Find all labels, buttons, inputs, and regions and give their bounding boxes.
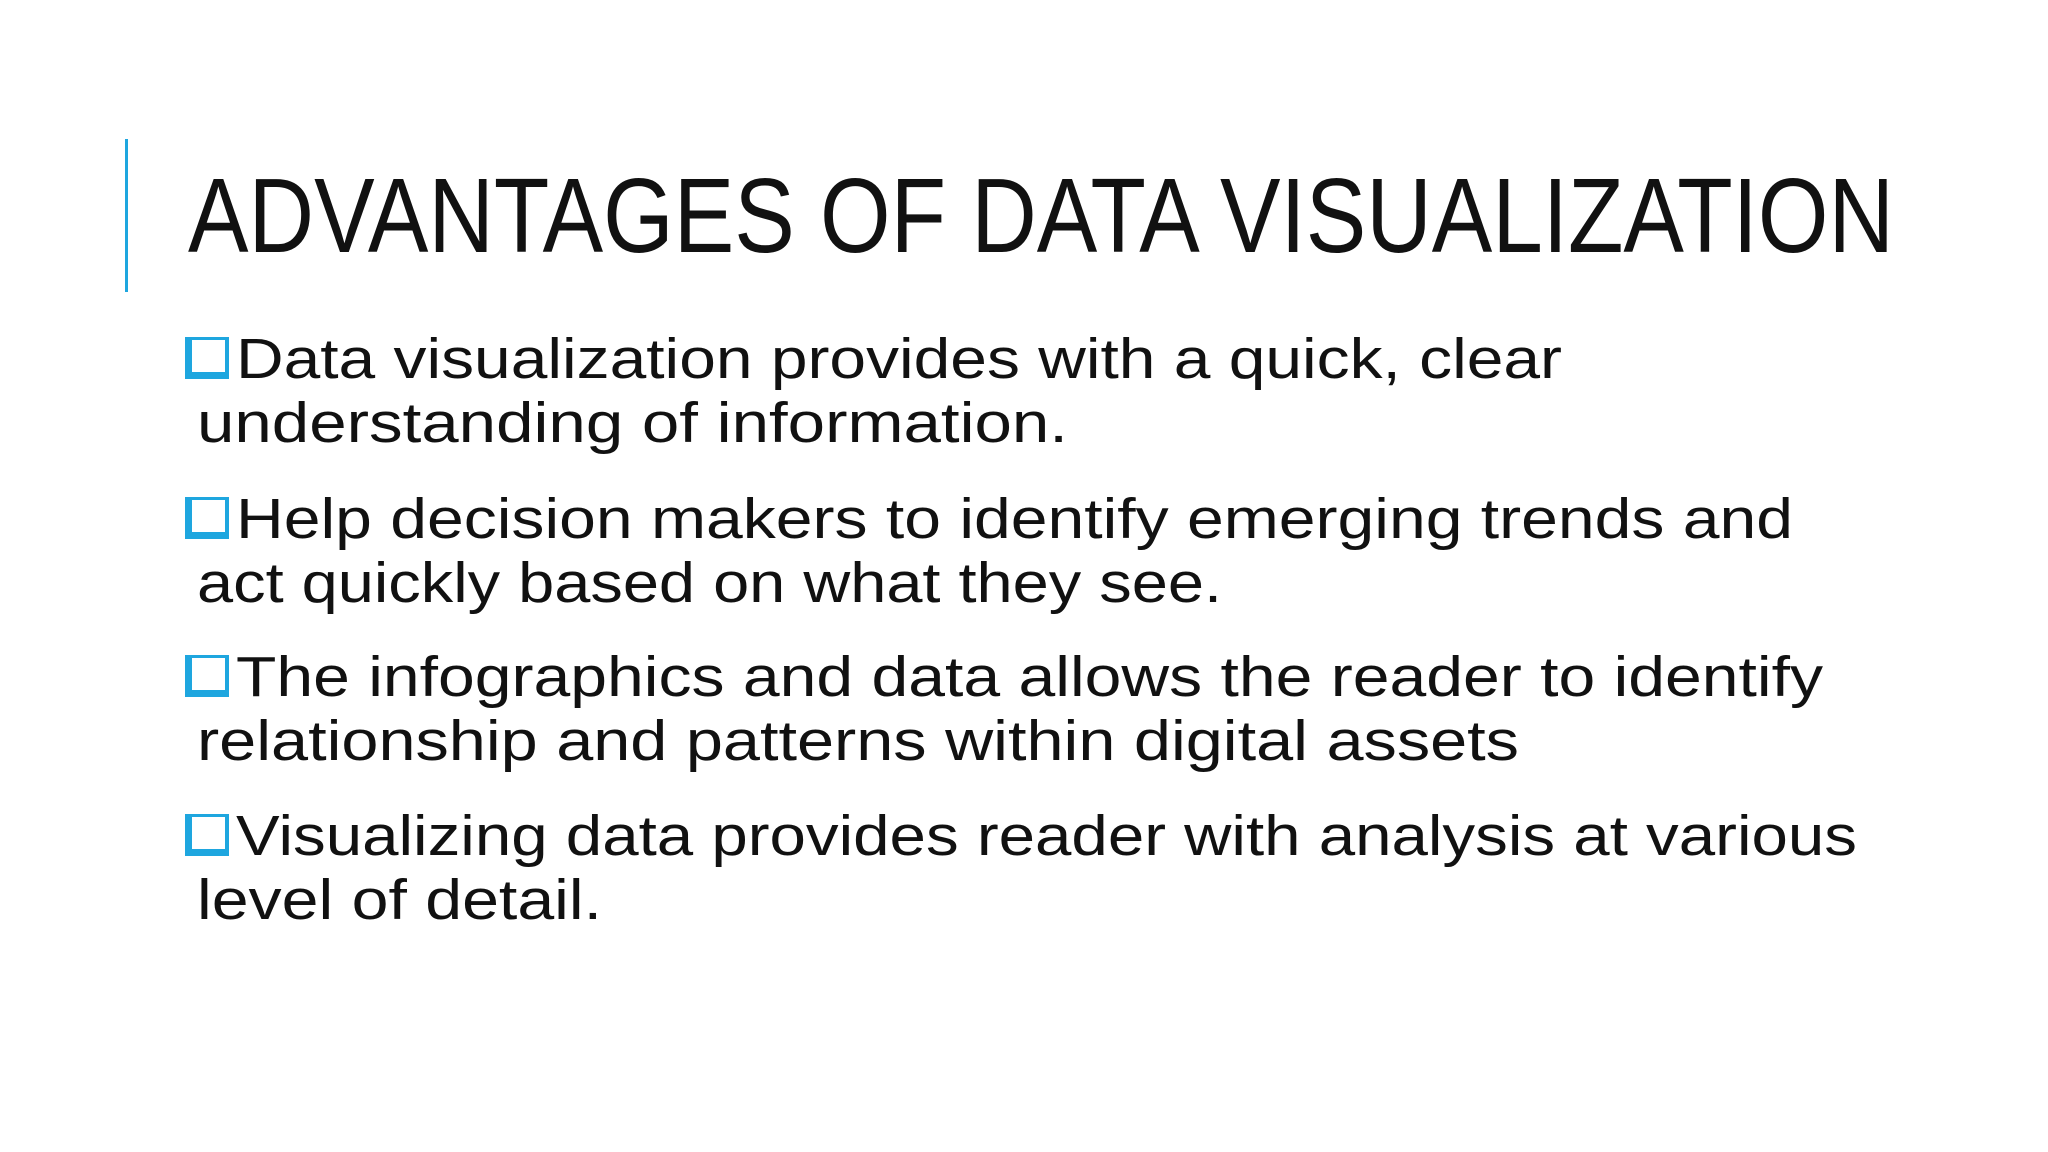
bullet list — [185, 327, 1857, 932]
bullet 4: level of detail. — [197, 868, 602, 932]
accent bar — [125, 139, 128, 292]
bullet 4 — [185, 804, 1857, 932]
bullet 3: relationship and patterns within digital assets — [197, 709, 1519, 773]
bullet 1: Data visualization provides with a quick, clear — [236, 327, 1562, 391]
bullet 3 — [185, 645, 1824, 773]
bullet 3: The infographics and data allows the reader to identify — [236, 645, 1824, 709]
bullet 4: Visualizing data provides reader with analysis at various — [236, 804, 1857, 868]
bullet 1 — [185, 327, 1562, 455]
bullet 2: Help decision makers to identify emerging trends and — [236, 487, 1793, 551]
bullet 2: act quickly based on what they see. — [197, 551, 1222, 615]
bullet 1: understanding of information. — [197, 391, 1068, 455]
bullet 2 — [185, 487, 1793, 615]
